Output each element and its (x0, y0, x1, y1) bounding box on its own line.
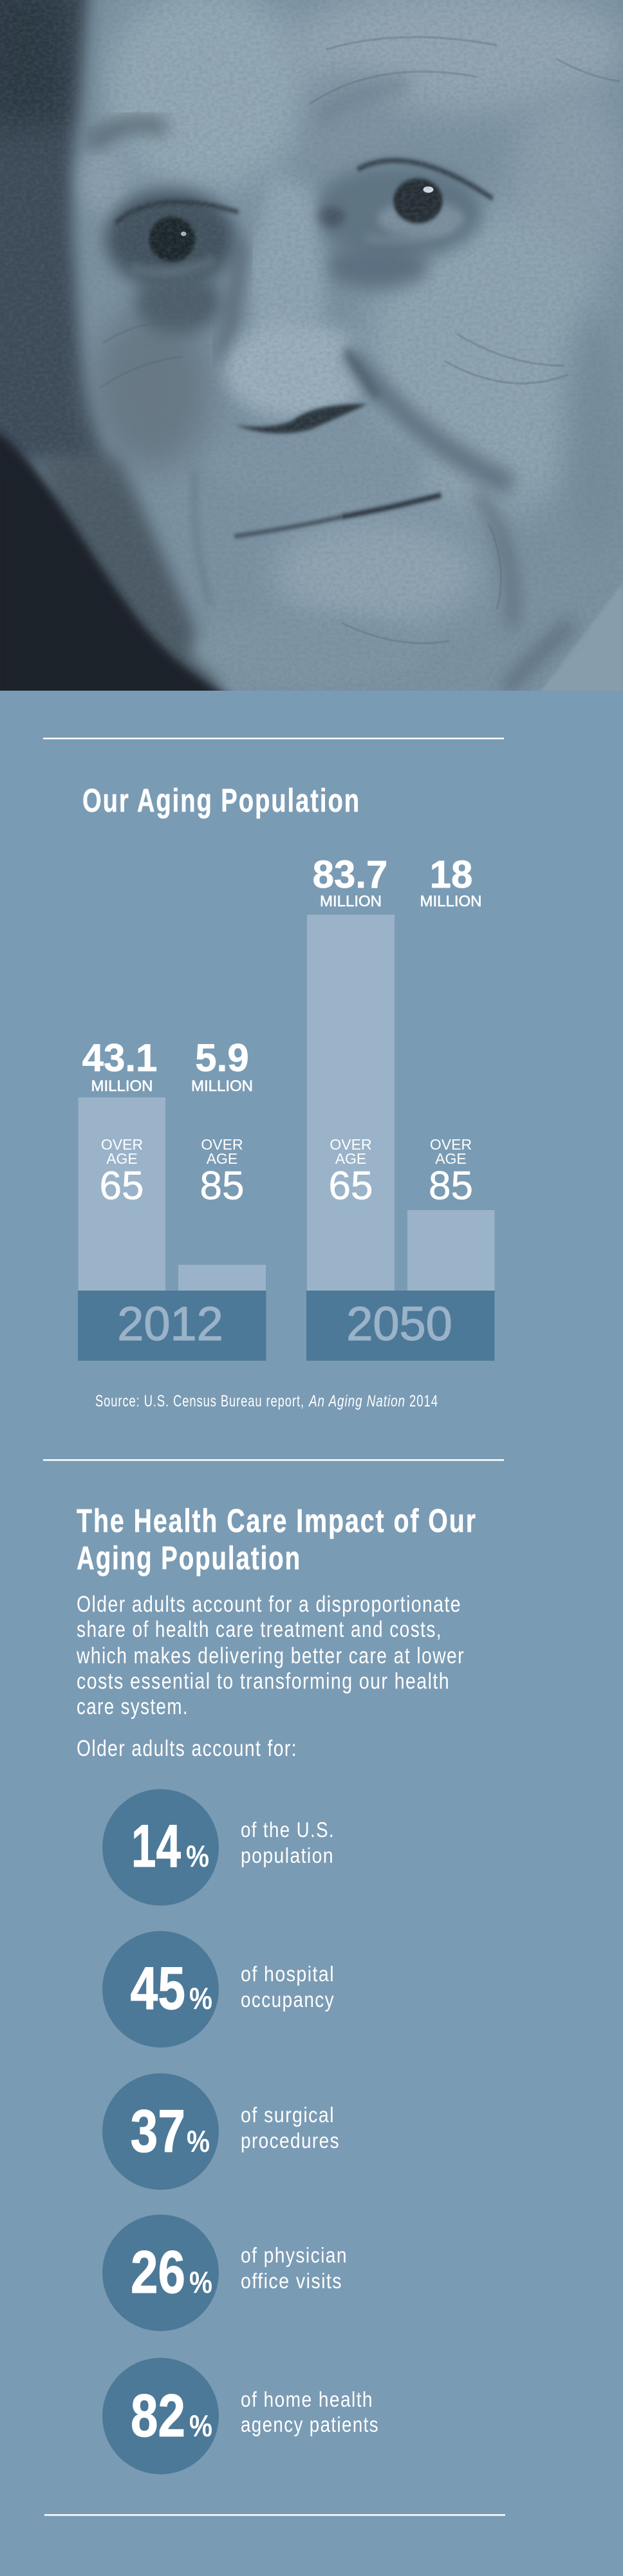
stat: 37 percent: procedures (241, 2129, 340, 2152)
heading: health care impact: The Health Care Impact of Our (77, 1502, 477, 1539)
heading: our aging population: Our Aging Population (82, 782, 360, 819)
intro paragraph: share of health care treatment and costs, (77, 1617, 442, 1642)
stat: 45 percent: 45 (130, 1954, 185, 2022)
bar: 2050 over 85: 18 (430, 853, 472, 896)
heading: health care impact: Aging Population (77, 1540, 301, 1576)
bar: 2050 over 85: MILLION (420, 893, 482, 910)
intro paragraph: costs essential to transforming our health (77, 1668, 450, 1694)
bar: 2012 over 85: OVER (201, 1136, 243, 1153)
stat: 14 percent: 14 (131, 1812, 181, 1880)
bar: 2012 over 85: 5.9 (195, 1036, 249, 1079)
heading: health care impact (77, 1502, 477, 1576)
stat: 82 percent: % (189, 2409, 212, 2443)
stat: 26 percent: % (189, 2265, 212, 2299)
bar: 2050 over 85 (407, 853, 494, 1291)
closing rule (44, 2514, 505, 2515)
bar: 2012 over 85: MILLION (191, 1078, 253, 1095)
stat: 37 percent: of surgical (241, 2103, 335, 2127)
section rule (43, 1459, 504, 1461)
bar: 2012 over 85: 85 (200, 1164, 244, 1208)
bar: 2050 over 65: 83.7 (313, 853, 387, 896)
year band: 2012 (78, 1291, 266, 1361)
stat: 26 percent: of physician (241, 2243, 348, 2267)
bar: 2012 over 85: AGE (207, 1150, 237, 1167)
stat: 82 percent: 82 (131, 2382, 185, 2449)
bar: 2050 over 85: 85 (429, 1164, 473, 1208)
intro paragraph (76, 1592, 465, 1719)
bar: 2050 over 65 (307, 853, 395, 1291)
bar: 2050 over 85: OVER (430, 1136, 472, 1153)
source note: Source: U.S. Census Bureau report, (95, 1392, 304, 1410)
stat: 14 percent: population (241, 1843, 334, 1867)
stat: 45 percent: of hospital (241, 1962, 335, 1986)
stat: 82 percent: agency patients (241, 2413, 379, 2436)
stat: 45 percent: occupancy (241, 1988, 335, 2011)
year band: 2012: 2012 (117, 1297, 223, 1350)
bar: 2012 over 65: OVER (101, 1136, 143, 1153)
stat: 82 percent: of home health (241, 2387, 373, 2411)
intro paragraph: which makes delivering better care at lower (76, 1643, 465, 1668)
bar: 2012 over 65: AGE (106, 1150, 138, 1167)
panel: our aging population (43, 738, 504, 1410)
bar: 2050 over 65: MILLION (320, 893, 382, 910)
stat: 26 percent (102, 2214, 348, 2331)
stat: 82 percent (102, 2358, 379, 2474)
lead-in sentence: Older adults account for: (77, 1736, 297, 1761)
intro paragraph: care system. (77, 1694, 189, 1719)
photo: close-up portrait of an elderly woman (0, 0, 623, 691)
stat: 14 percent: % (186, 1839, 209, 1873)
stat: 45 percent (102, 1931, 335, 2048)
year band: 2050: 2050 (346, 1297, 452, 1350)
source note: 2014 (409, 1392, 438, 1410)
stat: 14 percent: of the U.S. (241, 1818, 335, 1842)
bar: 2050 over 65: 65 (329, 1164, 373, 1208)
bar: 2012 over 85 (178, 1036, 266, 1291)
bar: 2050 over 65: AGE (335, 1150, 366, 1167)
bar chart: population by age group (78, 853, 494, 1361)
stat: 14 percent (102, 1789, 335, 1905)
stat: 37 percent: 37 (130, 2097, 185, 2165)
bar: 2012 over 65 (79, 1036, 165, 1291)
section rule (43, 738, 504, 739)
bar: 2050 over 65: OVER (330, 1136, 372, 1153)
bar: 2012 over 65: MILLION (91, 1078, 153, 1095)
bar: 2050 over 85: AGE (435, 1150, 467, 1167)
stat: 37 percent (102, 2073, 340, 2190)
stat: 26 percent: office visits (241, 2269, 342, 2293)
bar: 2012 over 65: 43.1 (82, 1036, 157, 1079)
source note: An Aging Nation (308, 1392, 405, 1410)
intro paragraph: Older adults account for a disproportionate (77, 1592, 461, 1617)
bar: 2012 over 65: 65 (100, 1164, 144, 1208)
year band: 2050 (306, 1291, 494, 1361)
panel: health care impact (43, 1459, 505, 2515)
stat: 26 percent: 26 (131, 2238, 185, 2306)
stat: 37 percent: % (187, 2124, 210, 2158)
stat: 45 percent: % (189, 1981, 212, 2015)
